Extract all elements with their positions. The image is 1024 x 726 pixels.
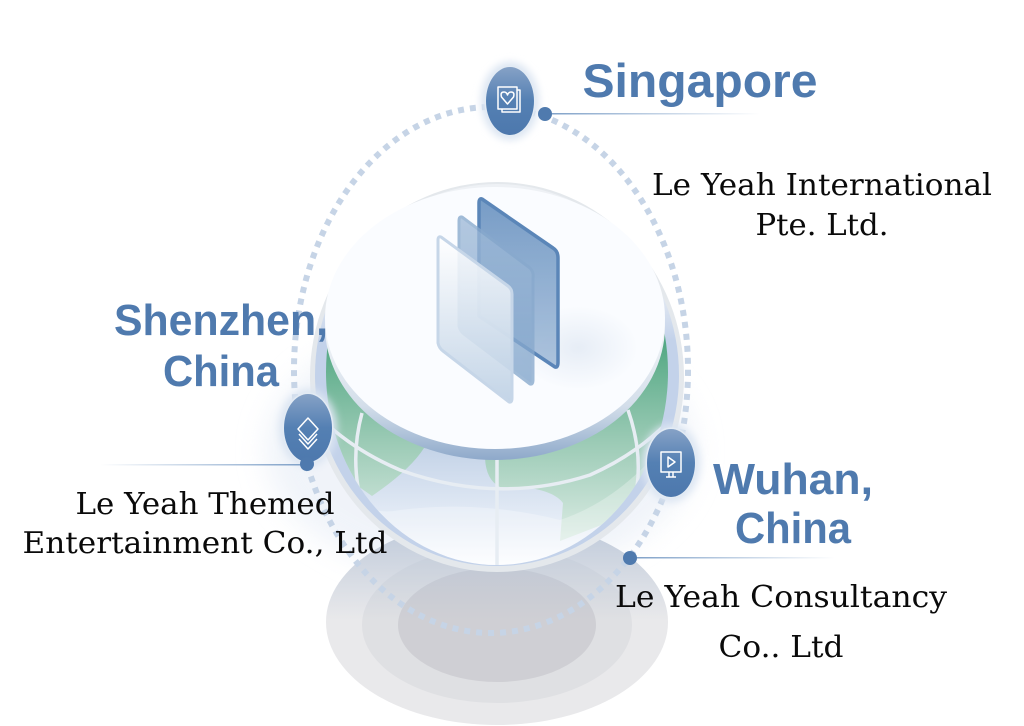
top disc rim <box>325 192 665 460</box>
text: Wuhan company: Co.. Ltd <box>718 630 844 665</box>
front card <box>438 237 512 402</box>
icon: video screen <box>661 452 681 477</box>
heading: Shenzhen: China <box>163 347 279 396</box>
heading: Shenzhen: Shenzhen, <box>114 296 328 345</box>
text: Singapore company: Le Yeah International <box>652 168 992 203</box>
text: Shenzhen company: Entertainment Co., Ltd <box>22 526 388 561</box>
globe grid lines <box>330 410 667 566</box>
middle card <box>459 217 533 384</box>
pin: Shenzhen <box>279 389 337 467</box>
land band <box>320 330 680 541</box>
pin: Singapore <box>481 62 539 140</box>
back card <box>479 199 558 367</box>
heading: Wuhan: Wuhan, <box>713 455 873 504</box>
connector: Shenzhen <box>100 457 314 471</box>
icon: heart cards <box>498 87 520 112</box>
stacked cards icon <box>438 199 558 402</box>
pin: Wuhan <box>642 424 700 502</box>
globe ocean and continents <box>320 330 680 570</box>
heading: Singapore: Singapore <box>582 54 818 107</box>
ambient globe glow <box>265 320 695 580</box>
heading: Wuhan: China <box>735 504 851 553</box>
text: Shenzhen company: Le Yeah Themed <box>76 487 334 522</box>
text: Singapore company: Pte. Ltd. <box>756 208 888 243</box>
globe <box>310 182 684 572</box>
top disc <box>325 187 665 449</box>
dotted orbit ring <box>294 107 688 633</box>
globe shell <box>310 182 684 572</box>
glass highlight <box>420 468 644 540</box>
connector: Wuhan <box>623 551 835 565</box>
connector: Singapore <box>538 107 760 121</box>
ground shadow <box>326 540 668 725</box>
icon: layers <box>298 418 318 449</box>
text: Wuhan company: Le Yeah Consultancy <box>615 580 947 615</box>
